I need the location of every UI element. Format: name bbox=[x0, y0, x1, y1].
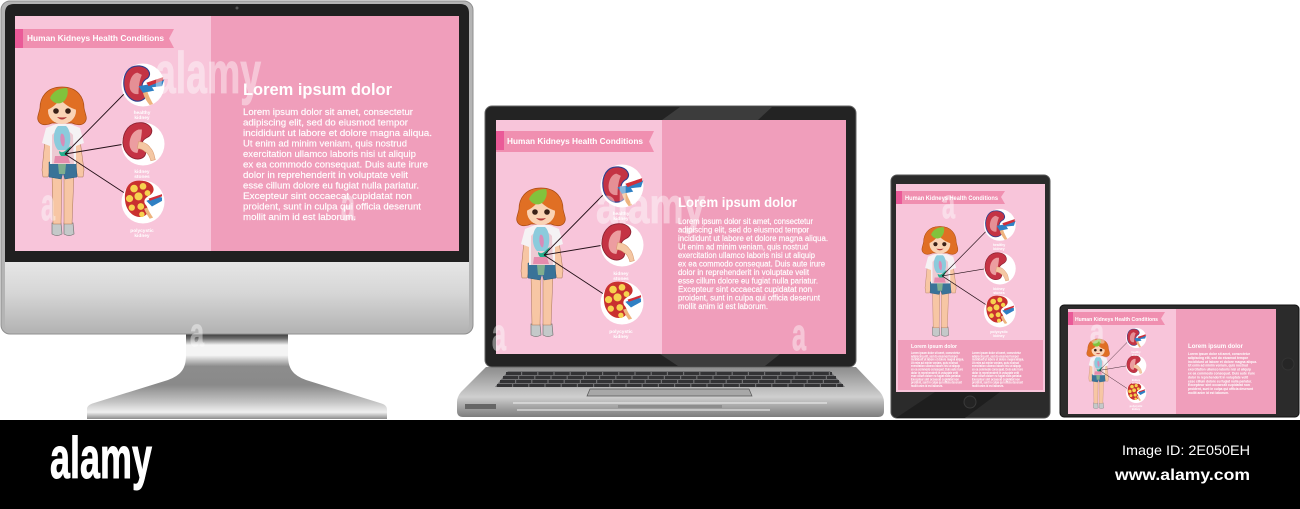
desktop monitor bbox=[1, 1, 473, 419]
slide left panel bbox=[15, 16, 211, 251]
slide body text bbox=[1188, 352, 1257, 395]
right column text: incididunt ut labore et dolore magna aliqua. bbox=[972, 358, 1024, 362]
tablet body bbox=[891, 175, 1050, 418]
laptop base bbox=[457, 367, 884, 417]
laptop bbox=[457, 106, 884, 417]
slide body text: ex ea commodo consequat. Duis aute irure bbox=[243, 160, 428, 170]
left column text: Excepteur sint occaecat cupidatat non bbox=[911, 377, 959, 381]
right column text: mollit anim id est laborum. bbox=[972, 384, 1004, 388]
slide body text: esse cillum dolore eu fugiat nulla pariatur. bbox=[1188, 379, 1252, 383]
watermarks: a bbox=[792, 309, 807, 360]
kidney labels: kidney bbox=[613, 334, 629, 340]
banner title: Human Kidneys Health Conditions bbox=[507, 137, 644, 146]
watermarks bbox=[41, 41, 1105, 360]
right column text: dolor in reprehenderit in voluptate velit bbox=[972, 371, 1020, 375]
slide body text: mollit anim id est laborum. bbox=[243, 212, 356, 223]
banner accent bbox=[496, 131, 504, 150]
kidney labels: kidney bbox=[1132, 353, 1141, 357]
kidney labels: healthy bbox=[993, 243, 1005, 247]
slide body text: Ut enim ad minim veniam, quis nostrud bbox=[1188, 364, 1248, 368]
girl anatomy and kidneys illustration bbox=[517, 164, 644, 336]
slide right panel bbox=[211, 16, 459, 251]
slide body text: incididunt ut labore et dolore magna aliqua. bbox=[1188, 360, 1257, 364]
banner title: Human Kidneys Health Conditions bbox=[905, 196, 999, 202]
laptop hinge mark bbox=[618, 405, 722, 408]
slide body text: dolor in reprehenderit in voluptate velit bbox=[678, 268, 810, 277]
slide body text: adipiscing elit, sed do eiusmod tempor bbox=[1188, 356, 1249, 360]
alamy logo: alamy bbox=[50, 426, 152, 491]
banner bbox=[496, 131, 654, 152]
panel heading: Lorem ipsum dolor bbox=[911, 344, 957, 350]
girl anatomy and kidneys illustration bbox=[922, 209, 1016, 336]
slide body text: adipiscing elit, sed do eiusmod tempor bbox=[678, 226, 809, 234]
left column text bbox=[911, 351, 964, 388]
watermarks: a bbox=[492, 309, 507, 360]
banner bbox=[1068, 312, 1165, 325]
banner accent bbox=[896, 191, 902, 204]
phone camera button bbox=[1282, 358, 1294, 370]
smartphone bbox=[1060, 305, 1299, 417]
slide body text: Lorem ipsum dolor sit amet, consectetur bbox=[1188, 352, 1251, 356]
slide body text: Excepteur sint occaecat cupidatat non bbox=[678, 285, 812, 294]
slide body text: Ut enim ad minim veniam, quis nostrud bbox=[243, 138, 407, 150]
slide body text: dolor in reprehenderit in voluptate velit bbox=[1188, 375, 1249, 379]
watermarks: a bbox=[341, 179, 356, 230]
slide body text: Excepteur sint occaecat cupidatat non bbox=[243, 191, 412, 202]
left column text: Lorem ipsum dolor sit amet, consectetur bbox=[911, 351, 961, 355]
watermarks: alamy bbox=[155, 41, 261, 106]
monitor chin bbox=[5, 262, 469, 331]
banner accent bbox=[15, 29, 23, 48]
banner bbox=[896, 191, 1005, 204]
banner title: Human Kidneys Health Conditions bbox=[1075, 317, 1158, 323]
kidney labels: polycystic bbox=[1130, 404, 1143, 408]
kidney labels: healthy bbox=[134, 110, 151, 116]
kidney labels: kidney bbox=[134, 169, 150, 175]
left column text: Ut enim ad minim veniam, quis nostrud bbox=[911, 361, 958, 365]
right column text: esse cillum dolore eu fugiat nulla pariatur. bbox=[972, 374, 1022, 378]
slide on tablet bbox=[896, 184, 1045, 392]
phone body bbox=[1060, 305, 1299, 417]
slide body text: proident, sunt in culpa qui officia deserunt bbox=[678, 294, 821, 302]
slide body text: adipiscing elit, sed do eiusmod tempor bbox=[243, 118, 408, 128]
slide body text: exercitation ullamco laboris nisi ut aliquip bbox=[243, 149, 416, 160]
slide body text: ex ea commodo consequat. Duis aute irure bbox=[1188, 372, 1255, 376]
slide background bbox=[896, 184, 1045, 392]
slide body text: dolor in reprehenderit in voluptate velit bbox=[243, 170, 408, 181]
left column text: exercitation ullamco laboris nisi ut aliquip bbox=[911, 364, 960, 368]
kidney labels: kidney bbox=[134, 115, 150, 121]
kidney labels bbox=[990, 243, 1008, 338]
right column text: Lorem ipsum dolor sit amet, consectetur bbox=[972, 351, 1022, 355]
kidney labels: healthy bbox=[613, 211, 630, 217]
slide on phone bbox=[1068, 309, 1276, 414]
kidney labels: stones bbox=[134, 174, 150, 180]
slide body text: mollit anim id est laborum. bbox=[1188, 391, 1229, 395]
slide body text: exercitation ullamco laboris nisi ut aliquip bbox=[678, 251, 816, 260]
kidney labels: kidney bbox=[993, 334, 1005, 338]
slide on laptop bbox=[496, 120, 846, 354]
slide heading: Lorem ipsum dolor bbox=[1188, 344, 1244, 350]
kidney labels: kidney bbox=[993, 287, 1005, 291]
watermarks: a bbox=[41, 179, 56, 230]
trackpad bbox=[587, 389, 752, 396]
slide body text bbox=[243, 107, 432, 223]
kidney labels: polycystic bbox=[130, 228, 154, 234]
kidney labels bbox=[130, 110, 154, 239]
slide body text: esse cillum dolore eu fugiat nulla pariatur. bbox=[678, 276, 818, 286]
tablet reflection bbox=[896, 392, 1000, 418]
kidney labels: kidney bbox=[613, 271, 629, 277]
left column text: ex ea commodo consequat. Duis aute irure bbox=[911, 368, 963, 372]
kidney labels: stones bbox=[1132, 381, 1141, 385]
laptop lid bbox=[485, 106, 856, 367]
tablet bbox=[891, 175, 1050, 418]
footer bar bbox=[0, 420, 1300, 509]
kidney labels: healthy bbox=[1131, 350, 1141, 354]
watermarks: a bbox=[190, 311, 204, 355]
monitor screen slide bbox=[15, 16, 459, 251]
slide body text: Ut enim ad minim veniam, quis nostrud bbox=[678, 242, 808, 252]
kidney labels bbox=[1130, 350, 1143, 411]
laptop lid reflections bbox=[660, 107, 780, 366]
slide heading: Lorem ipsum dolor bbox=[678, 194, 798, 210]
girl anatomy and kidneys illustration bbox=[1087, 328, 1146, 409]
banner title: Human Kidneys Health Conditions bbox=[27, 34, 165, 43]
right column text: adipiscing elit, sed do eiusmod tempor bbox=[972, 354, 1020, 358]
slide body text bbox=[678, 217, 828, 311]
slide body text: proident, sunt in culpa qui officia deserunt bbox=[1188, 387, 1254, 391]
right column text: ex ea commodo consequat. Duis aute irure bbox=[972, 368, 1023, 372]
slide body text: incididunt ut labore et dolore magna aliqua. bbox=[678, 234, 828, 243]
slide body text: Lorem ipsum dolor sit amet, consectetur bbox=[678, 217, 813, 226]
kidney labels: polycystic bbox=[609, 329, 633, 335]
slide body text: incididunt ut labore et dolore magna aliqua. bbox=[243, 128, 432, 139]
slide body text: esse cillum dolore eu fugiat nulla pariatur. bbox=[243, 180, 419, 192]
right column text: Ut enim ad minim veniam, quis nostrud bbox=[972, 361, 1019, 365]
slide heading: Lorem ipsum dolor bbox=[243, 80, 392, 99]
slide body text: Excepteur sint occaecat cupidatat non bbox=[1188, 383, 1250, 387]
text panel bbox=[898, 340, 1043, 390]
slide right panel bbox=[662, 120, 846, 354]
slide body text: exercitation ullamco laboris nisi ut aliquip bbox=[1188, 368, 1252, 372]
laptop base highlights bbox=[513, 403, 827, 410]
kidney labels: kidney bbox=[134, 233, 150, 239]
girl anatomy and kidneys illustration bbox=[38, 64, 165, 236]
left column text: dolor in reprehenderit in voluptate velit bbox=[911, 371, 959, 375]
right column text: exercitation ullamco laboris nisi ut aliquip bbox=[972, 364, 1021, 368]
banner accent bbox=[1068, 312, 1073, 325]
slide body text: ex ea commodo consequat. Duis aute irure bbox=[678, 260, 826, 268]
left column text: adipiscing elit, sed do eiusmod tempor bbox=[911, 354, 959, 358]
right column text: proident, sunt in culpa qui officia deserunt bbox=[972, 381, 1024, 385]
watermarks: a bbox=[942, 180, 955, 227]
slide body text: mollit anim id est laborum. bbox=[678, 302, 768, 311]
banner bbox=[15, 29, 174, 48]
laptop barcode bbox=[465, 404, 496, 409]
slide left panel bbox=[496, 120, 662, 354]
left column text: proident, sunt in culpa qui officia deserunt bbox=[911, 381, 963, 385]
left column text: mollit anim id est laborum. bbox=[911, 384, 943, 388]
image id: Image ID: 2E050EH bbox=[1122, 442, 1250, 458]
kidney labels: kidney bbox=[1132, 378, 1141, 382]
slide right panel bbox=[1176, 309, 1276, 414]
right column text bbox=[972, 351, 1024, 388]
slide body text: proident, sunt in culpa qui officia deserunt bbox=[243, 202, 421, 212]
kidney labels: polycystic bbox=[990, 330, 1008, 334]
left column text: incididunt ut labore et dolore magna aliqua. bbox=[911, 358, 964, 362]
slide body text: Lorem ipsum dolor sit amet, consectetur bbox=[243, 107, 413, 118]
kidney labels bbox=[609, 211, 633, 340]
watermarks: a bbox=[1090, 313, 1105, 351]
left column text: esse cillum dolore eu fugiat nulla pariatur. bbox=[911, 374, 961, 378]
kidney labels: kidney bbox=[993, 247, 1005, 251]
monitor body bbox=[1, 1, 473, 334]
watermarks: alamy bbox=[596, 178, 705, 234]
slide left panel bbox=[1068, 309, 1176, 414]
keyboard bbox=[495, 371, 845, 387]
kidney labels: kidney bbox=[613, 216, 629, 222]
right column text: Excepteur sint occaecat cupidatat non bbox=[972, 377, 1020, 381]
kidney labels: stones bbox=[993, 291, 1005, 295]
monitor camera bbox=[236, 6, 238, 10]
kidney labels: stones bbox=[613, 276, 629, 282]
monitor bezel bbox=[5, 4, 469, 262]
website: www.alamy.com bbox=[1114, 467, 1250, 484]
monitor stand bbox=[87, 333, 387, 419]
tablet home button bbox=[964, 396, 976, 408]
kidney labels: kidney bbox=[1132, 407, 1141, 411]
